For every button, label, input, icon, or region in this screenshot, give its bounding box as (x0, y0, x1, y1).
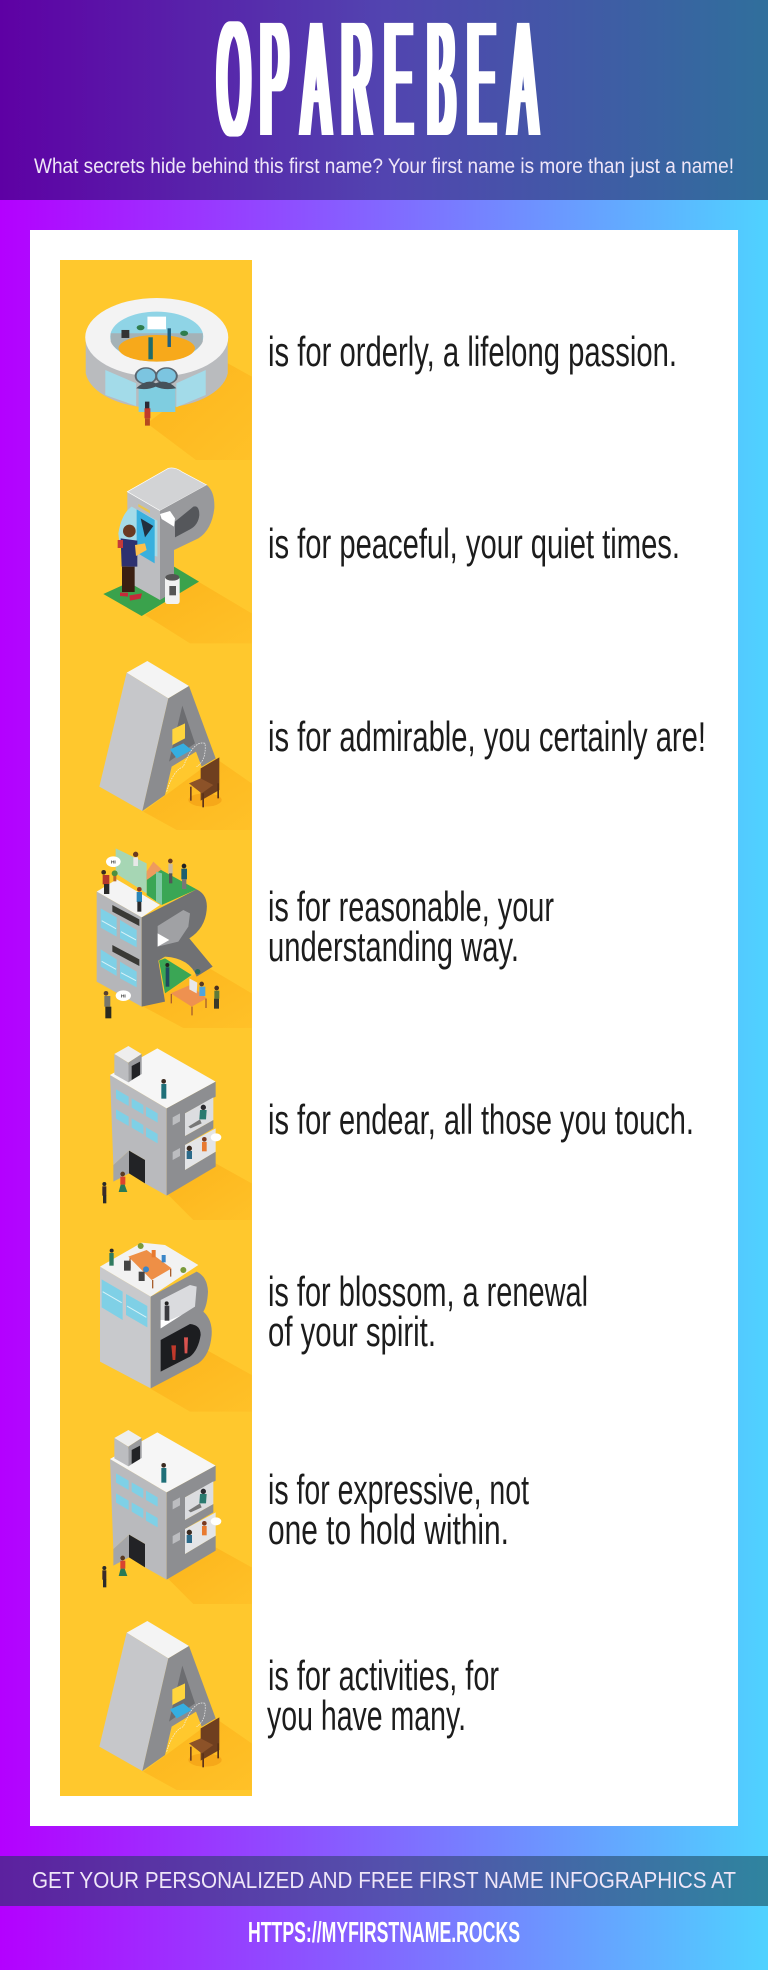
text: letter B lines: of your spirit. (268, 1308, 436, 1355)
footer band (0, 1856, 768, 1906)
footer url: HTTPS://MYFIRSTNAME.ROCKS (248, 1917, 520, 1949)
icon: A laptop and chair (99, 661, 252, 830)
text: letter E second lines: is for expressive, not (268, 1466, 529, 1513)
header band (0, 0, 768, 200)
icon: B meeting building (100, 1243, 252, 1412)
text: letter R lines (268, 883, 554, 970)
text: letter A second lines: you have many. (267, 1692, 466, 1739)
white content panel (30, 230, 738, 1826)
icon: A laptop and chair repeat (99, 1621, 252, 1790)
icon: O optician building (85, 298, 252, 460)
icon: E apartment building (102, 1046, 252, 1220)
icon: R office building (97, 848, 252, 1028)
text: letter A second lines: is for activities, for (268, 1652, 499, 1699)
icon: P cash machine (103, 468, 252, 643)
icon: E apartment building repeat (102, 1430, 252, 1604)
text: letter B lines: is for blossom, a renewal (268, 1268, 588, 1315)
text: letter B lines (268, 1268, 588, 1355)
text: letter A second lines (267, 1652, 499, 1739)
text: letter E second lines: one to hold within. (268, 1506, 509, 1553)
yellow illustration column (60, 260, 252, 1796)
text: letter E second lines (268, 1466, 529, 1553)
text: letter R lines: is for reasonable, your (268, 883, 554, 930)
text: letter R lines: understanding way. (268, 923, 519, 970)
speech bubble text: HI (111, 860, 116, 866)
icon: R office building: HI (121, 994, 126, 1000)
